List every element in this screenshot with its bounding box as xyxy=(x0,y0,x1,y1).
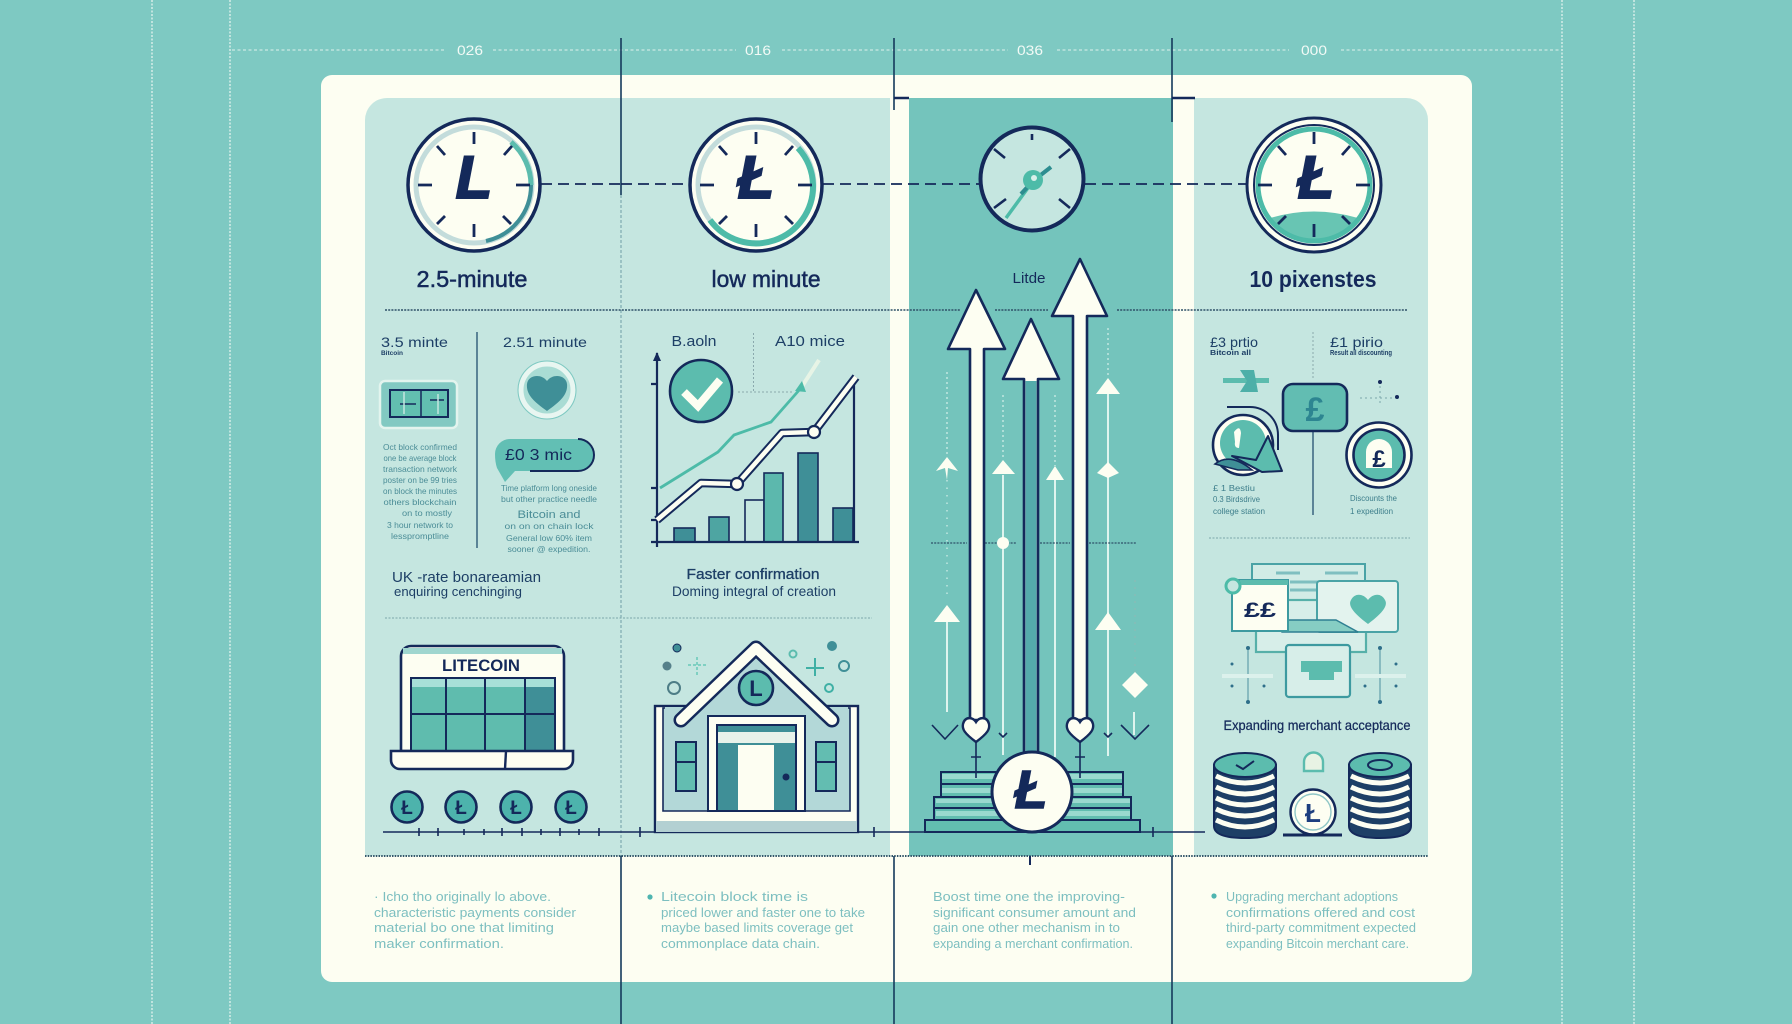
top ruler with column labels: 026 xyxy=(457,43,483,58)
crosshair details xyxy=(1222,648,1406,702)
text block: right small copy xyxy=(501,483,597,554)
icon: block device xyxy=(380,381,457,428)
roof xyxy=(681,648,832,720)
text block: column 3 footer: expanding a merchant confirmation. xyxy=(933,936,1133,951)
text block: left small copy xyxy=(383,442,458,541)
text block: right small copy: but other practice needle xyxy=(501,494,597,504)
chart labels: B.aoln xyxy=(672,334,716,350)
coin emblem xyxy=(739,671,773,705)
icon: pound box xyxy=(1283,384,1347,431)
top ruler with column labels: 000 xyxy=(1301,43,1327,58)
text block: column 4 footer: expanding Bitcoin merchant care. xyxy=(1226,936,1409,951)
icon: overlapping payment cards xyxy=(1222,564,1406,704)
panel 1: comparison details xyxy=(380,332,597,599)
chart labels: A10 mice xyxy=(775,334,845,350)
text block: column 1 footer: characteristic payments consider xyxy=(374,905,577,920)
text block: column 1 footer xyxy=(374,889,577,951)
text block: column 4 footer xyxy=(1211,889,1416,951)
caption xyxy=(672,567,836,599)
small text: 1 expedition xyxy=(1350,506,1393,516)
chart labels xyxy=(672,334,845,350)
icon: pound badge xyxy=(1346,422,1412,488)
text block: left small copy: on to mostly xyxy=(402,508,453,518)
text block: left small copy: 3 hour network to xyxy=(387,520,453,530)
small text: 0.3 Birdsdrive xyxy=(1213,494,1260,504)
text block: column 3 footer xyxy=(933,889,1136,951)
column headings xyxy=(416,266,1376,292)
text block: left small copy: one be average block xyxy=(384,453,457,463)
text block: column 1 footer: maker confirmation. xyxy=(374,936,504,951)
icon: laptop with LITECOIN table: LITECOIN xyxy=(442,656,520,675)
arrows: small white rising markers xyxy=(931,328,1149,757)
icon: pound badge: £ xyxy=(1372,446,1386,473)
text block: column 1 footer: · Icho tho originally lo above. xyxy=(374,889,551,904)
clock 1 xyxy=(408,119,540,251)
chevrons xyxy=(932,725,1149,739)
icon: scatter dots xyxy=(1360,380,1399,406)
clock 2 symbol: Ł xyxy=(737,144,774,211)
icon: laptop with LITECOIN table xyxy=(391,646,573,769)
icon: coin row xyxy=(392,792,586,822)
column headings: Litde xyxy=(1012,270,1046,287)
clock 4 xyxy=(1247,118,1381,252)
text block: right small copy: Bitcoin and xyxy=(518,509,580,521)
label: left block time: 3.5 minte xyxy=(381,334,448,350)
callout pill: £0 3 mic xyxy=(505,447,572,464)
text block: column 3 footer: Boost time one the improving- xyxy=(933,889,1125,904)
windows xyxy=(676,742,836,791)
clock 4 symbol: Ł xyxy=(1297,144,1334,211)
text block: column 1 footer: material bo one that limiting xyxy=(374,920,554,935)
icon: merchant house xyxy=(655,641,858,832)
clock 1 symbol: L xyxy=(456,144,492,211)
text block: column 2 footer: maybe based limits coverage get xyxy=(661,920,853,935)
text block: left small copy: others blockchain xyxy=(384,497,457,507)
caption: enquiring cenchinging xyxy=(394,584,522,599)
icon: coin row: Ł xyxy=(455,798,467,819)
column headings: 10 pixenstes xyxy=(1250,266,1376,292)
caption xyxy=(392,569,541,599)
icon: heart badge xyxy=(518,361,576,419)
axes xyxy=(651,353,859,547)
icon: right coin stack xyxy=(1349,753,1411,838)
icon: left coin stack xyxy=(1214,753,1276,838)
caption: Expanding merchant acceptance xyxy=(1224,717,1411,733)
small text: Discounts the xyxy=(1350,493,1397,503)
text block: column 2 footer xyxy=(647,889,865,951)
top ruler with column labels xyxy=(232,43,1561,58)
icon: pound box: £ xyxy=(1306,391,1325,429)
caption: Faster confirmation xyxy=(686,567,820,583)
text block: column 2 footer: Litecoin block time is xyxy=(661,889,809,904)
labels: Bitcoin all xyxy=(1210,350,1251,357)
text block: right small copy: on on on chain lock xyxy=(504,521,594,531)
arrow 3 xyxy=(1052,259,1107,778)
icon: coin row: Ł xyxy=(565,798,577,819)
label: left block time xyxy=(381,334,448,357)
clock 3 gauge xyxy=(980,128,1084,230)
icon: middle coin xyxy=(1283,790,1342,835)
text block: left small copy: transaction network xyxy=(383,464,458,474)
text block: column 2 footer: priced lower and faster one to take xyxy=(661,905,865,920)
arrow 2 xyxy=(1003,319,1059,761)
label: right block time: 2.51 minute xyxy=(503,334,587,350)
icon: speech badge xyxy=(1213,407,1282,475)
panel 4: merchant details xyxy=(1209,332,1412,838)
text block: left small copy: Oct block confirmed xyxy=(383,442,457,452)
icon: merchant house: L xyxy=(749,676,763,701)
text block: right small copy: sooner @ expedition. xyxy=(508,544,590,554)
column headings: low minute xyxy=(712,266,820,292)
central coin xyxy=(992,752,1072,832)
caption: Doming integral of creation xyxy=(672,584,836,599)
labels: £3 prtio xyxy=(1210,334,1258,350)
icon: diamond xyxy=(1122,672,1148,698)
icon: coin row: Ł xyxy=(510,798,522,819)
text block: left small copy: poster on be 99 tries xyxy=(383,475,457,485)
text block: left small copy: on block the minutes xyxy=(383,486,457,496)
small text xyxy=(1213,483,1397,516)
icon: coin row: Ł xyxy=(401,798,413,819)
text block: column 2 footer: commonplace data chain. xyxy=(661,936,820,951)
label: left block time: Bitcoin xyxy=(381,350,403,357)
top ruler with column labels: 016 xyxy=(745,43,771,58)
callout pill xyxy=(495,439,594,482)
clock 2 xyxy=(690,119,822,251)
teal trend line xyxy=(660,360,819,488)
text block: right small copy: General low 60% item xyxy=(506,533,592,543)
icon: transfer arrow xyxy=(1223,370,1269,392)
labels xyxy=(1210,334,1392,357)
small text: college station xyxy=(1213,506,1265,516)
text block: column 4 footer: Upgrading merchant adoptions xyxy=(1226,889,1398,904)
bars xyxy=(674,453,853,542)
timeline axis xyxy=(383,827,1205,837)
central coin: Ł xyxy=(1014,760,1048,820)
white trend line xyxy=(657,377,856,520)
floating dots xyxy=(662,641,849,694)
panel: column backgrounds xyxy=(365,98,1428,856)
arrow 1 xyxy=(948,290,1005,778)
caption: UK -rate bonareamian xyxy=(392,569,541,586)
icon: middle coin: Ł xyxy=(1305,798,1321,828)
text block: right small copy: Time platform long oneside xyxy=(501,483,597,493)
top ruler with column labels: 036 xyxy=(1017,43,1043,58)
text block: column 4 footer: third-party commitment expected xyxy=(1226,920,1416,935)
text block: left small copy: lesspromptline xyxy=(391,531,449,541)
labels: Result all discounting xyxy=(1330,350,1392,357)
main card xyxy=(321,75,1472,982)
icon: check badge xyxy=(670,360,732,422)
text block: column 3 footer: gain one other mechanism in to xyxy=(933,920,1120,935)
column headings: 2.5-minute xyxy=(416,266,528,292)
icon: overlapping payment cards: ££ xyxy=(1244,599,1276,622)
labels: £1 pirio xyxy=(1330,334,1383,350)
icon: lock xyxy=(1304,752,1323,771)
coin stacks under arrows xyxy=(925,772,1140,832)
text block: column 3 footer: significant consumer amount and xyxy=(933,905,1136,920)
panel 2: line and bar chart xyxy=(651,333,859,599)
small text: £ 1 Bestiu xyxy=(1213,483,1255,493)
text block: column 4 footer: confirmations offered and cost xyxy=(1226,905,1415,920)
